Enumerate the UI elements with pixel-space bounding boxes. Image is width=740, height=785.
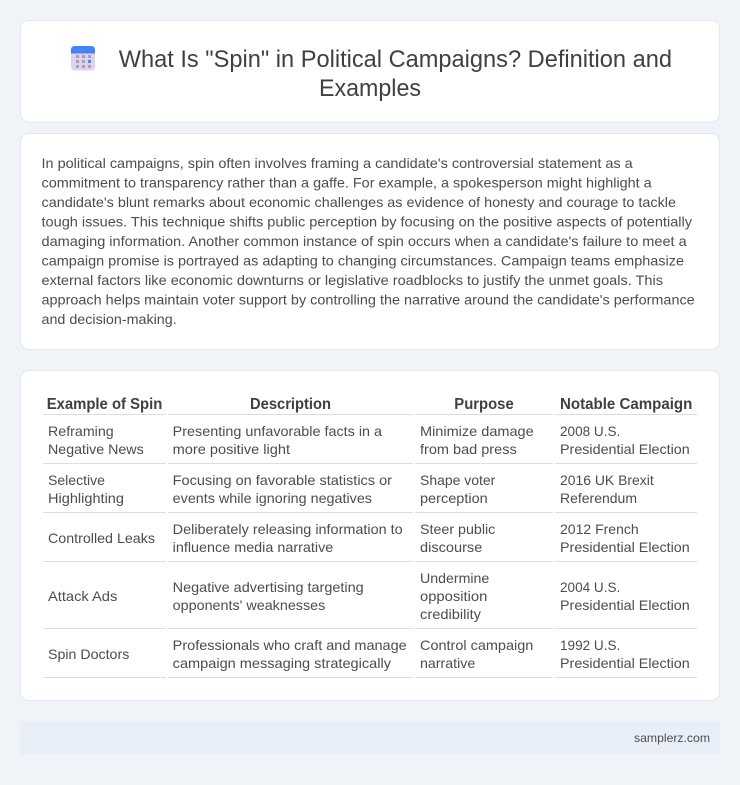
table header row [43, 396, 697, 415]
table row: attack ads: opponents' weaknesses [173, 597, 325, 613]
table row: selective highlighting: events while ignoring negatives [173, 490, 372, 506]
text block: definition and examples: damaging information. Another common instance of spin occurs when a candidate's failure to meet a [42, 233, 687, 249]
table header row: Purpose [454, 396, 514, 413]
table row: reframing negative news [43, 423, 697, 464]
panel: spin examples table [20, 370, 720, 700]
table row: controlled leaks: Deliberately releasing information to [173, 521, 403, 537]
table row: controlled leaks: discourse [420, 539, 483, 555]
table row: spin doctors: Professionals who craft and manage [173, 637, 407, 653]
table row: reframing negative news: Minimize damage [420, 423, 534, 439]
text block: definition and examples: external factors like economic downturns or legislative roadblocks to justify the unmet goals. This [42, 272, 663, 288]
table row: spin doctors: Spin Doctors [48, 646, 129, 662]
table row: reframing negative news: Negative News [48, 441, 144, 457]
title: Examples [319, 75, 421, 102]
table row: selective highlighting: Highlighting [48, 490, 124, 506]
title: What Is "Spin" in Political Campaigns? Definition and [119, 46, 672, 73]
table row: attack ads: Presidential Election [560, 597, 690, 613]
text block: definition and examples: commitment to transparency rather than a gaffe. For example, a spokesperson might highlight a [42, 174, 652, 190]
table row: controlled leaks: 2012 French [560, 521, 639, 537]
table row: controlled leaks [43, 521, 697, 562]
icon: calendar [71, 46, 95, 70]
text block: definition and examples [42, 155, 695, 327]
table row: reframing negative news: Presenting unfavorable facts in a [173, 423, 382, 439]
footer bar [20, 721, 720, 755]
table row: selective highlighting: Shape voter [420, 472, 496, 488]
table row: attack ads: opposition [420, 588, 487, 604]
table row: reframing negative news: more positive light [173, 441, 290, 457]
table row: spin doctors: Presidential Election [560, 655, 690, 671]
text block: definition and examples: candidate's blunt remarks about economic challenges as evidence of honesty and courage to tackle [42, 194, 676, 210]
table row: attack ads [43, 570, 697, 629]
table header row: Notable Campaign [560, 396, 692, 413]
title [119, 46, 672, 102]
header panel [20, 20, 720, 122]
table row: controlled leaks: Steer public [420, 521, 495, 537]
table row: selective highlighting: Focusing on favorable statistics or [173, 472, 392, 488]
table row: selective highlighting: Selective [48, 472, 105, 488]
table row: controlled leaks: Presidential Election [560, 539, 690, 555]
table row: attack ads: Negative advertising targeting [173, 579, 364, 595]
table row: reframing negative news: 2008 U.S. [560, 423, 620, 439]
table row: attack ads: Undermine [420, 570, 490, 586]
panel: intro paragraph [20, 134, 720, 350]
table row: spin doctors: Control campaign [420, 637, 533, 653]
table row: spin doctors: narrative [420, 655, 476, 671]
table row: reframing negative news: from bad press [420, 441, 517, 457]
text block: definition and examples: and decision-making. [42, 311, 177, 327]
table header row: Example of Spin [47, 396, 162, 413]
table row: selective highlighting: perception [420, 490, 488, 506]
table row: controlled leaks: Controlled Leaks [48, 530, 155, 546]
table row: attack ads: Attack Ads [48, 588, 117, 604]
text block: definition and examples: campaign promise is portrayed as adapting to changing circumstances. Campaign teams emphasize [42, 252, 684, 268]
table row: reframing negative news: Reframing [48, 423, 114, 439]
footer bar: samplerz.com [634, 731, 710, 745]
table row: selective highlighting: 2016 UK Brexit [560, 472, 654, 488]
table row: spin doctors: campaign messaging strategically [173, 655, 391, 671]
text block: definition and examples: approach helps maintain voter support by controlling the narrative around the candidate's performance [42, 292, 695, 308]
table row: attack ads: credibility [420, 606, 481, 622]
table row: spin doctors: 1992 U.S. [560, 637, 620, 653]
table header row: Description [250, 396, 331, 413]
table row: selective highlighting [43, 472, 697, 513]
text block: definition and examples: tough issues. This technique shifts public perception by focusing on the positive aspects of potentially [42, 214, 692, 230]
table row: attack ads: 2004 U.S. [560, 579, 620, 595]
table row: controlled leaks: influence media narrative [173, 539, 334, 555]
text block: definition and examples: In political campaigns, spin often involves framing a candidate's controversial statement as a [42, 155, 633, 171]
table row: selective highlighting: Referendum [560, 490, 637, 506]
table row: reframing negative news: Presidential Election [560, 441, 690, 457]
table row: spin doctors [43, 637, 697, 678]
